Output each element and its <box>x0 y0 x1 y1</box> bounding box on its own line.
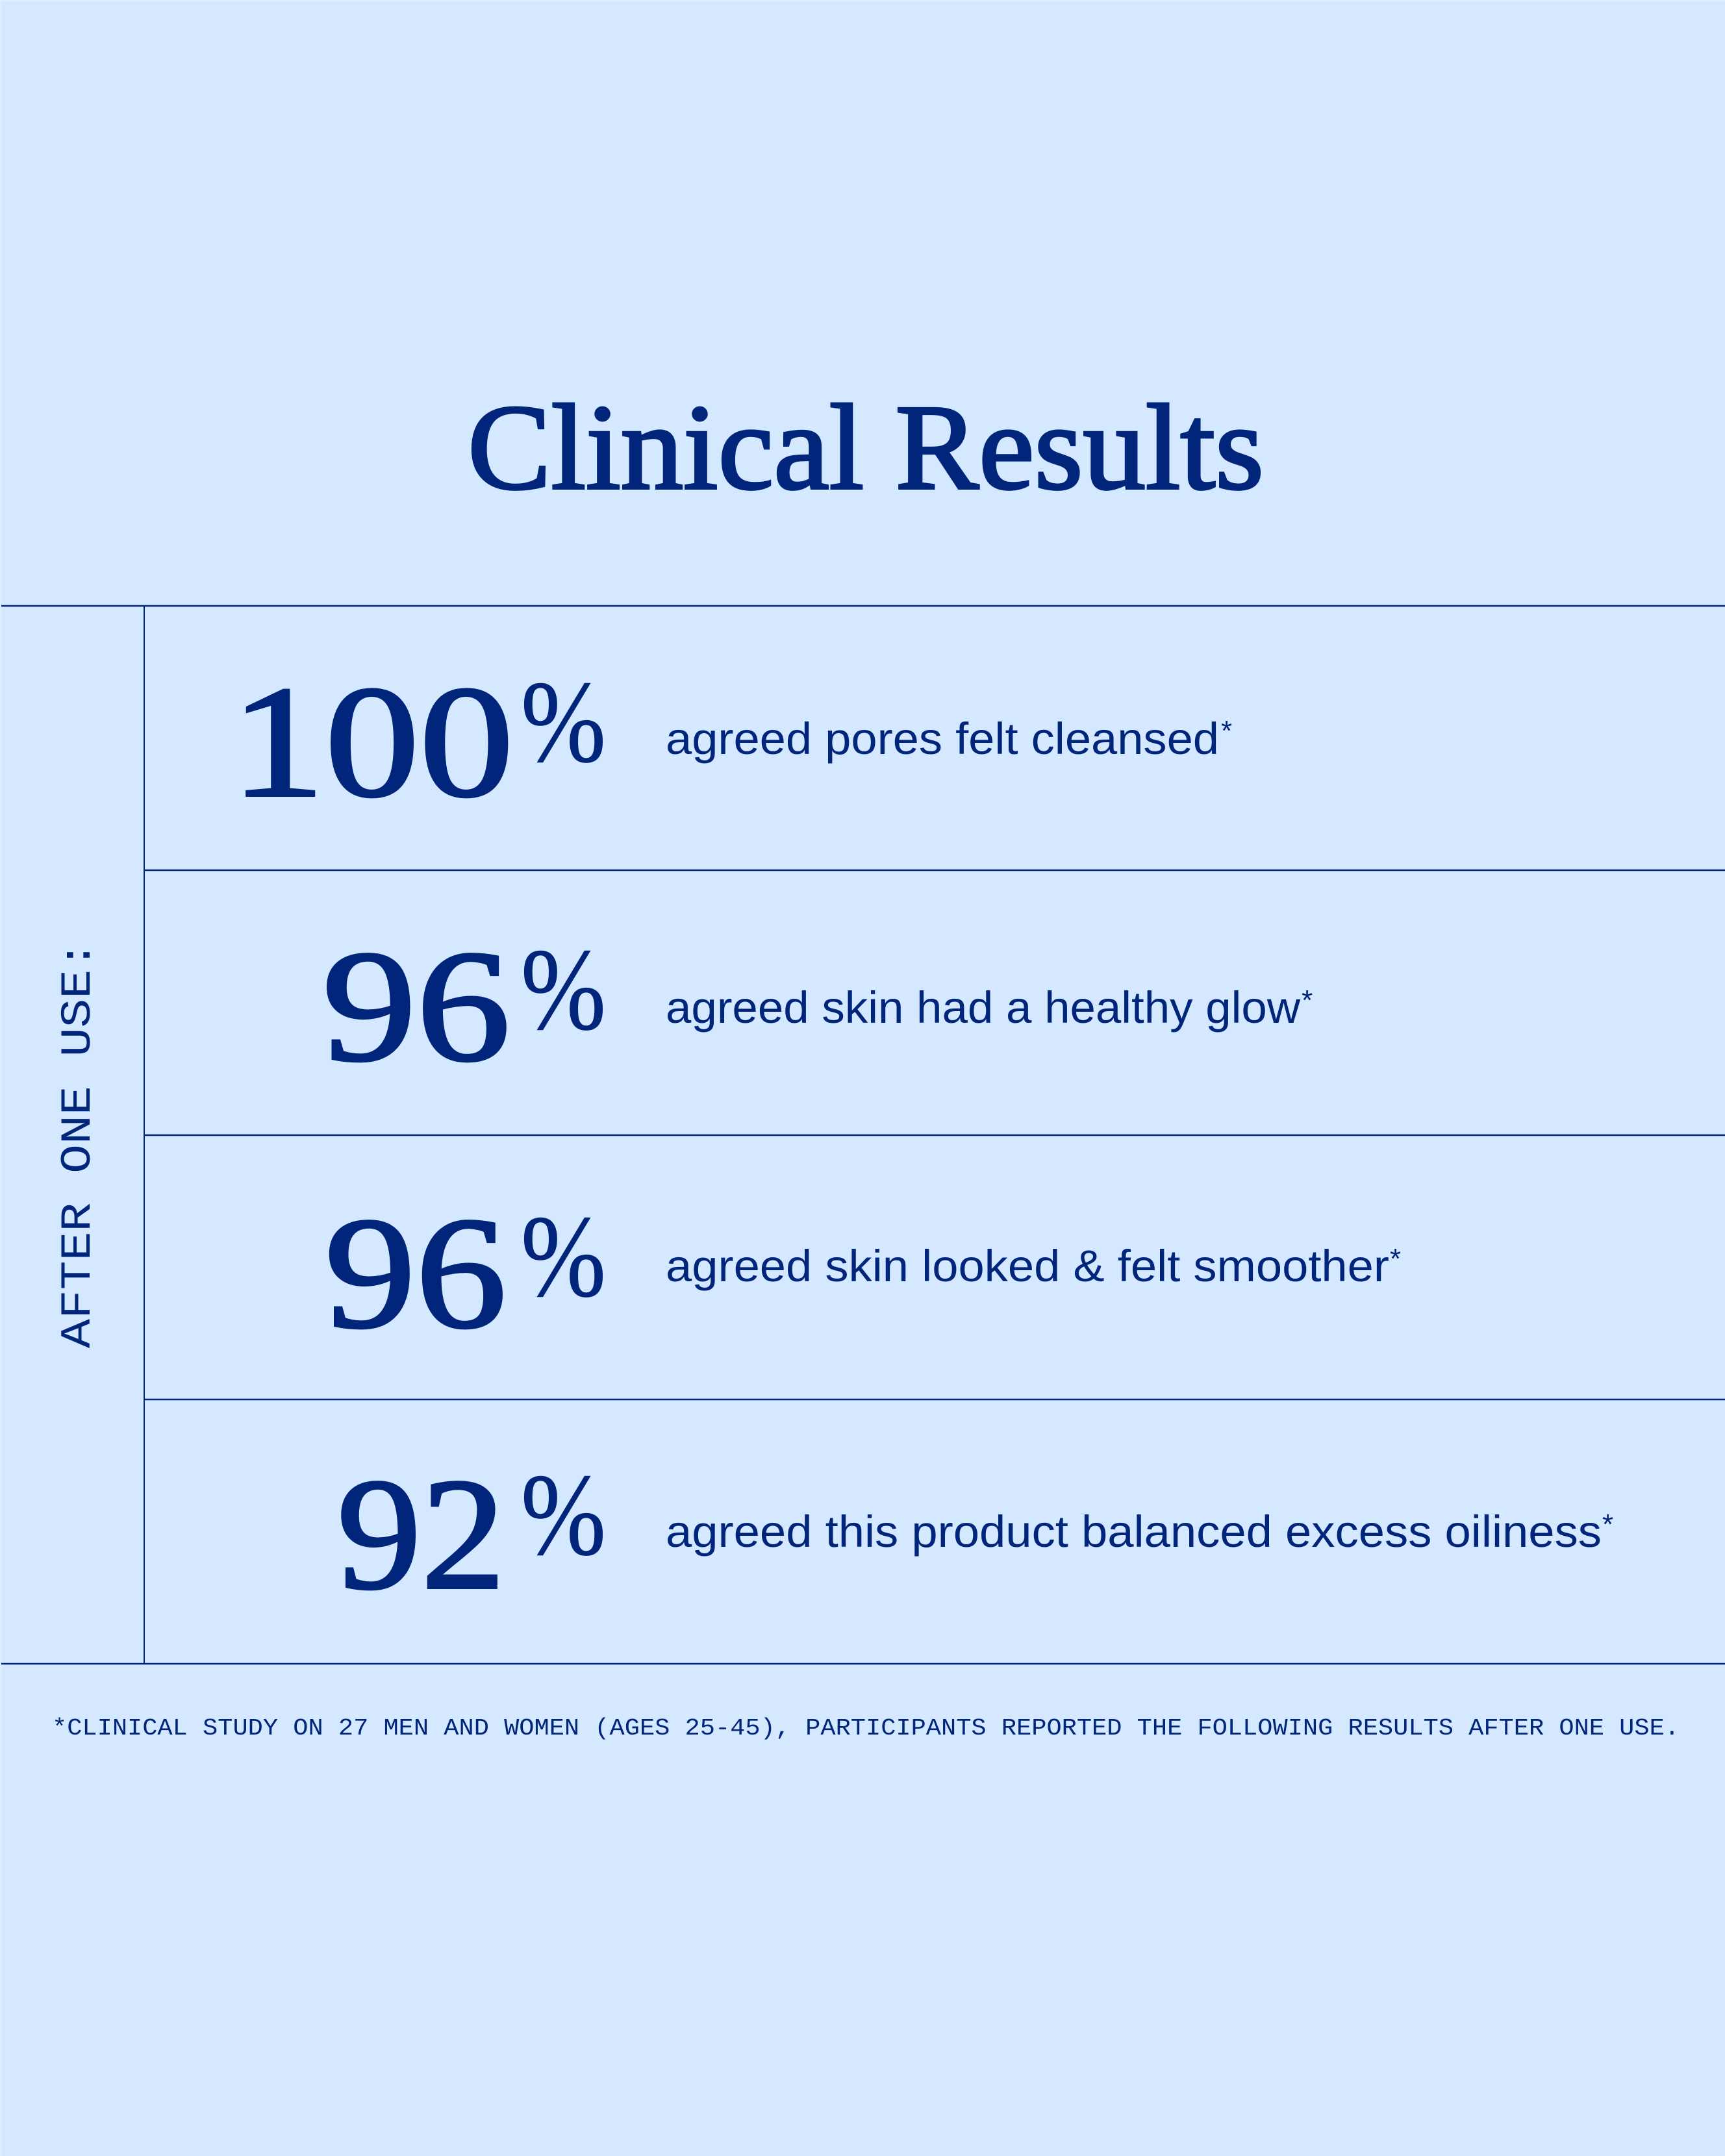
percent sign: % <box>521 1450 606 1579</box>
row 4: 92 percent <box>337 1446 1613 1623</box>
asterisk: * <box>1390 1243 1401 1275</box>
asterisk: * <box>1302 984 1313 1016</box>
percent sign: % <box>521 925 606 1054</box>
stat: 96: 96 <box>322 918 510 1095</box>
side label: after one use: AFTER ONE USE: <box>54 940 103 1348</box>
percent sign: % <box>521 1192 606 1321</box>
description: agreed skin looked & felt smoother <box>666 1241 1389 1291</box>
footnote: *CLINICAL STUDY ON 27 MEN AND WOMEN (AGES 25-45), PARTICIPANTS REPORTED THE FOLLOWING RESULTS AFTER ONE USE. <box>52 1715 1680 1742</box>
row 2: 96 percent <box>322 918 1313 1095</box>
table grid lines <box>1 606 1725 1664</box>
stat: 96: 96 <box>325 1185 507 1362</box>
description: agreed this product balanced excess oiliness <box>666 1507 1602 1557</box>
percent sign: % <box>521 657 606 786</box>
stat: 100: 100 <box>231 654 514 831</box>
description: agreed skin had a healthy glow <box>666 983 1300 1033</box>
title: Clinical Results <box>468 379 1264 515</box>
stat: 92: 92 <box>337 1446 505 1623</box>
description: agreed pores felt cleansed <box>666 714 1219 764</box>
row 1: 100 percent <box>231 654 1232 831</box>
asterisk: * <box>1602 1509 1613 1540</box>
asterisk: * <box>1221 715 1232 747</box>
row 3: 96 percent <box>325 1185 1401 1362</box>
